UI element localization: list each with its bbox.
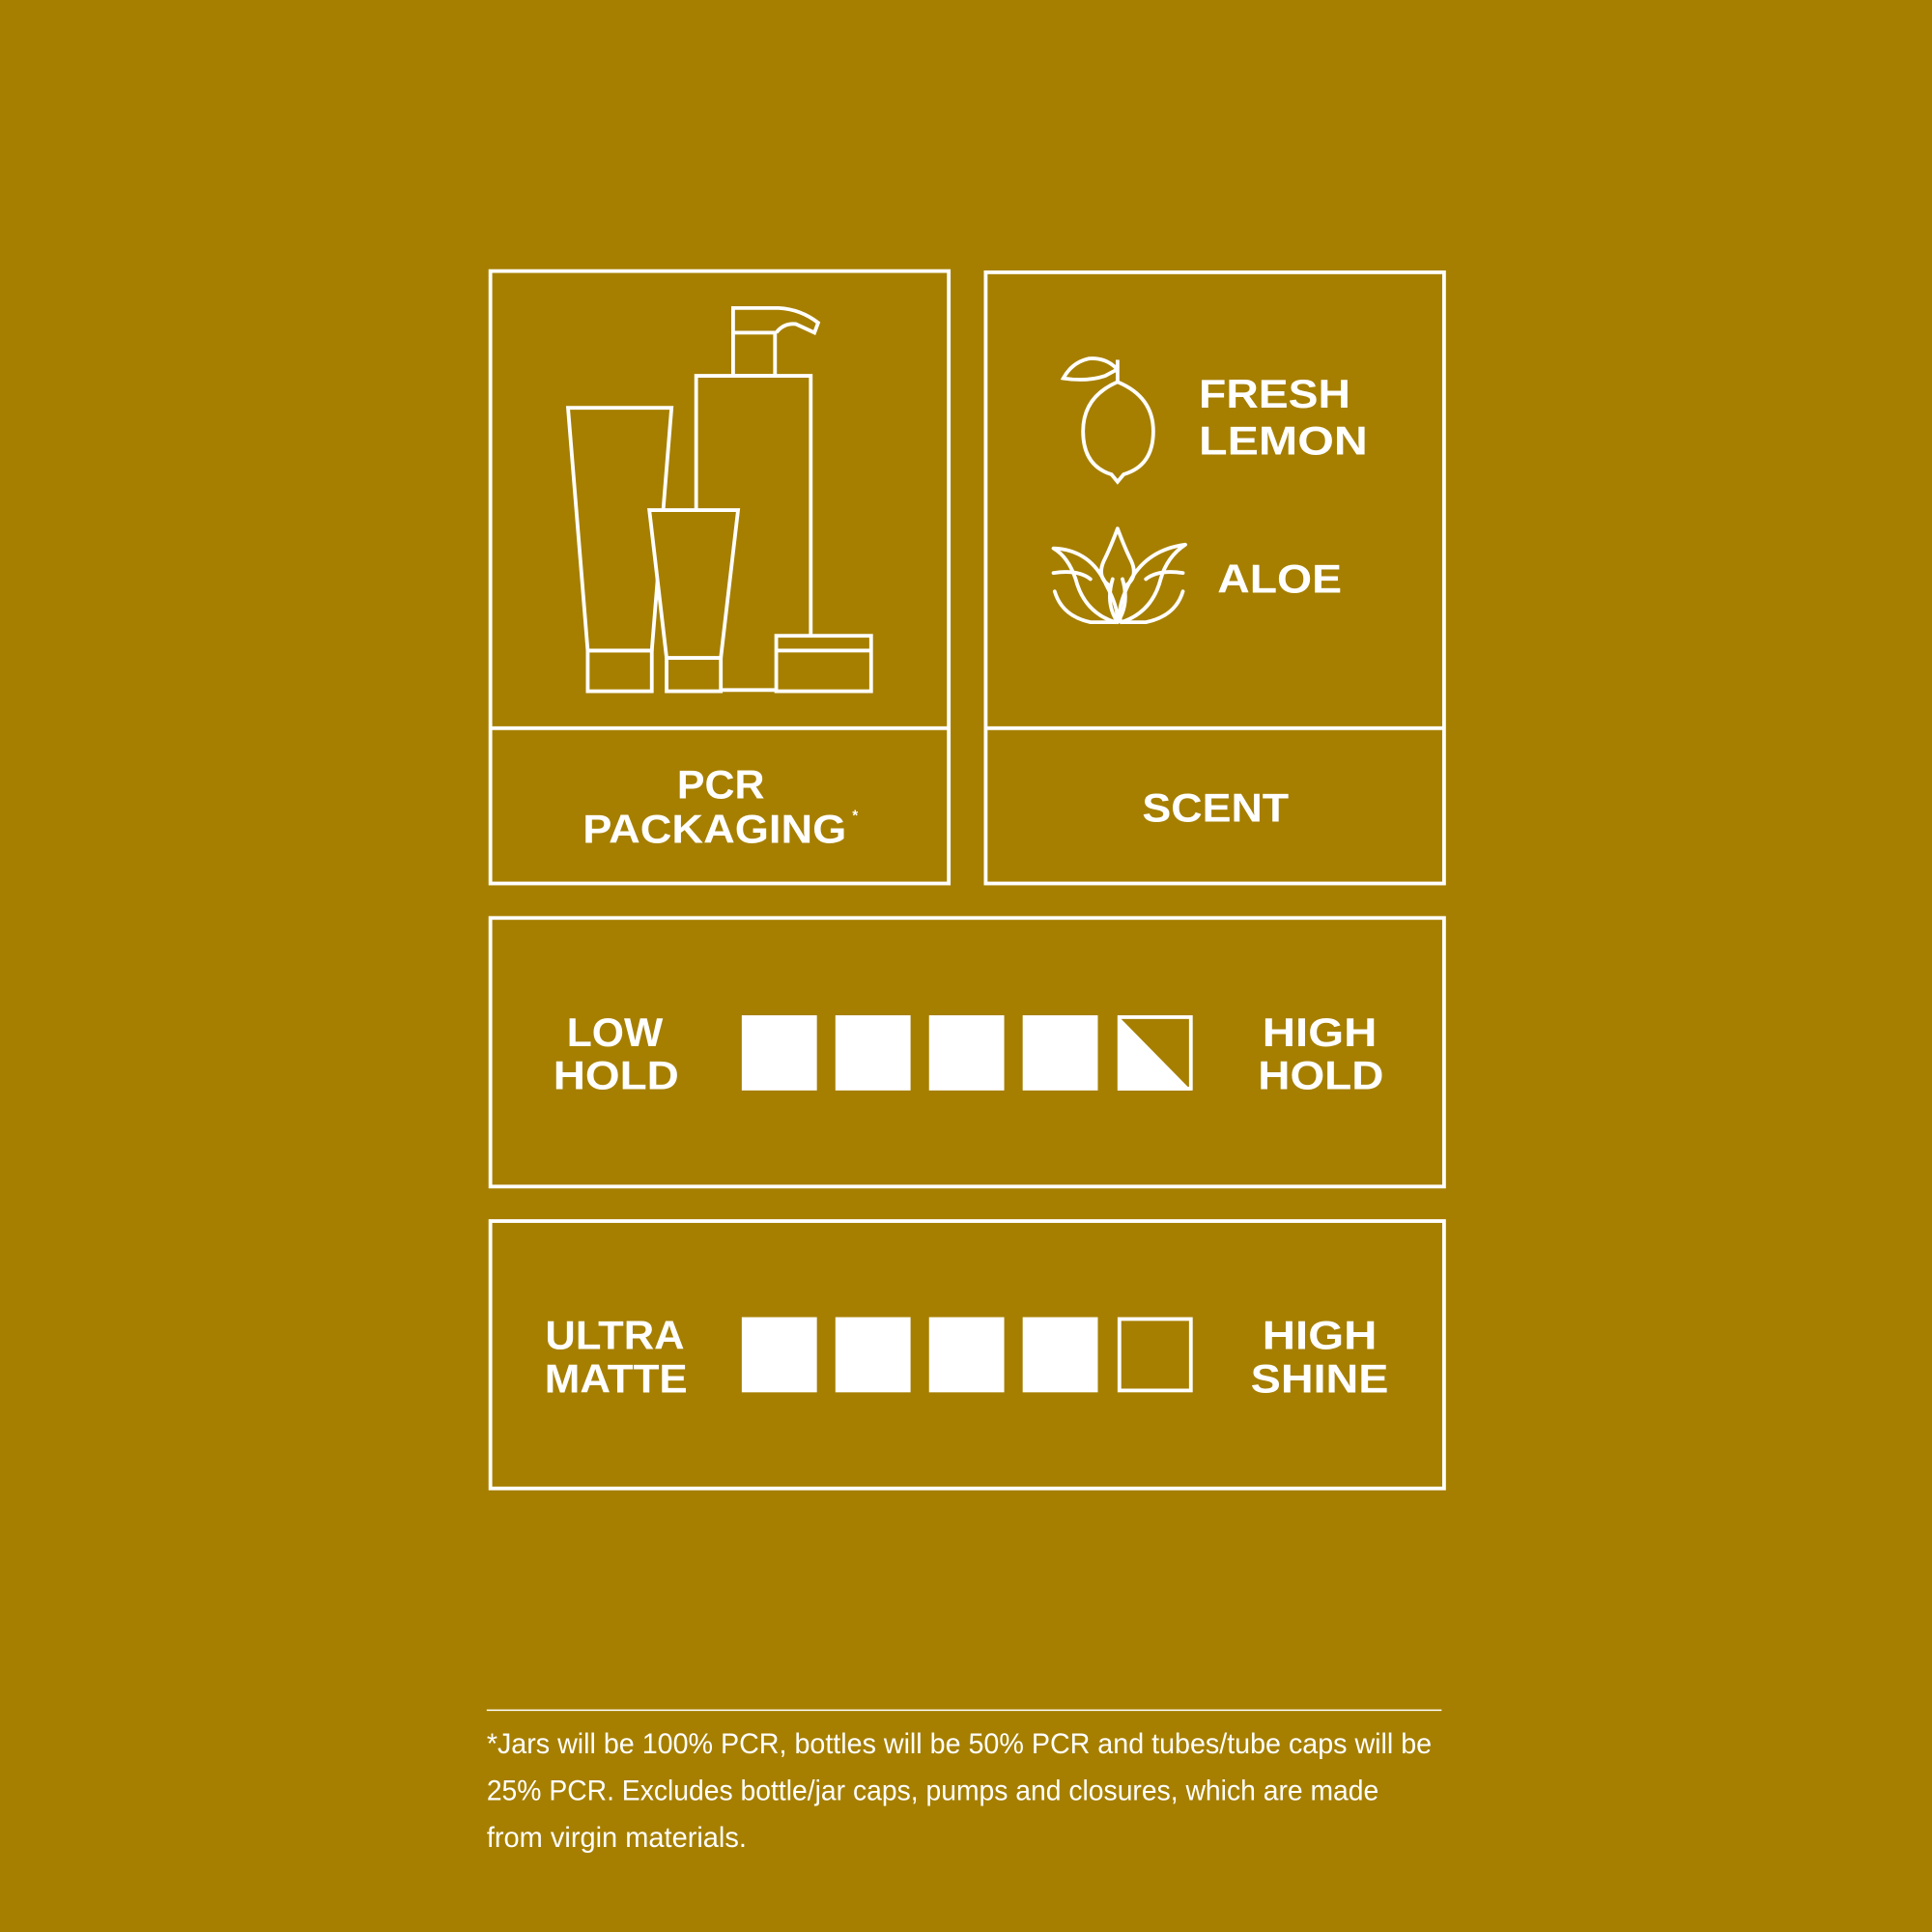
text: high shine: SHINE: [1251, 1355, 1388, 1401]
panel: hold scale: [491, 918, 1444, 1186]
footnote: *Jars will be 100% PCR, bottles will be 50% PCR and tubes/tube caps will be: [487, 1728, 1432, 1760]
icon: aloe: [1054, 528, 1185, 622]
text: high shine: [1251, 1313, 1389, 1401]
panel: shine scale: [491, 1221, 1444, 1489]
panel: pcr packaging: [491, 271, 949, 884]
text: scents: FRESH: [1199, 371, 1350, 416]
text: scents: ALOE: [1217, 556, 1342, 602]
footnote: [487, 1728, 1432, 1854]
scale: shine squares: [742, 1318, 1191, 1392]
heading: pcr packaging: PACKAGING: [582, 806, 846, 851]
text: low hold: [554, 1009, 679, 1098]
text: scents: [1199, 371, 1368, 602]
icon: lemon: [1064, 358, 1153, 482]
heading: pcr packaging: PCR: [677, 762, 764, 808]
text: ultra matte: ULTRA: [545, 1313, 685, 1358]
panel: scent: [985, 272, 1444, 884]
icon: packaging: [568, 308, 871, 692]
text: high hold: [1258, 1009, 1383, 1098]
footnote: 25% PCR. Excludes bottle/jar caps, pumps and closures, which are made: [487, 1776, 1378, 1807]
text: ultra matte: [545, 1313, 688, 1401]
text: ultra matte: MATTE: [545, 1355, 688, 1401]
footnote: from virgin materials.: [487, 1822, 747, 1854]
scale: hold squares: [742, 1015, 1191, 1091]
heading: scent: SCENT: [1142, 785, 1289, 831]
text: low hold: HOLD: [554, 1053, 679, 1098]
text: scents: LEMON: [1199, 418, 1368, 464]
text: high shine: HIGH: [1263, 1313, 1377, 1358]
text: high hold: HIGH: [1263, 1009, 1377, 1055]
text: high hold: HOLD: [1258, 1053, 1383, 1098]
text: low hold: LOW: [567, 1009, 664, 1055]
heading: pcr packaging: *: [852, 808, 858, 824]
heading: pcr packaging: [582, 762, 858, 851]
